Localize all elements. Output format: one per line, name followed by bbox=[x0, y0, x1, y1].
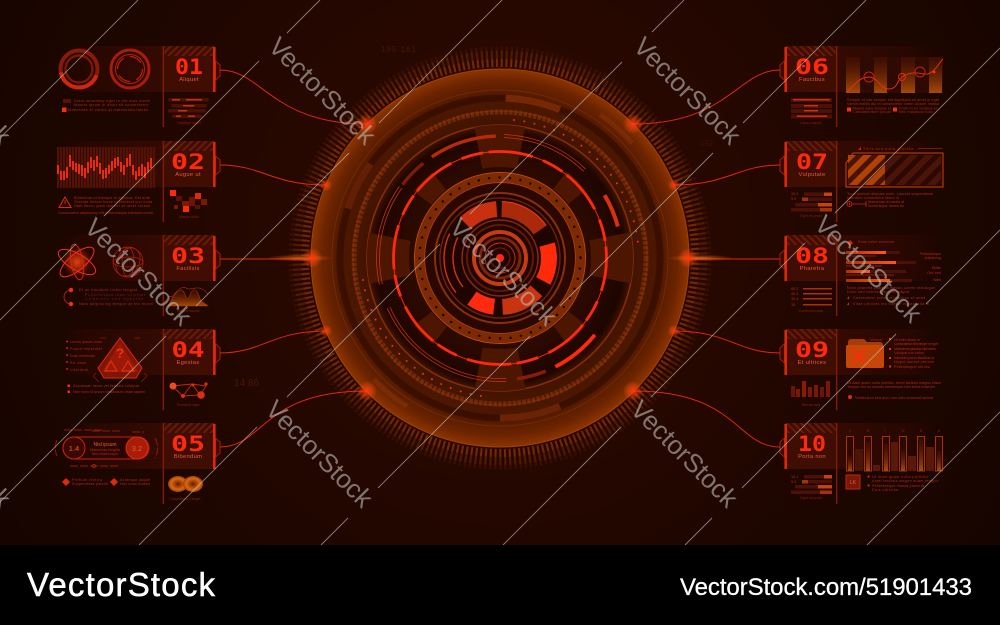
heading 06: 06 bbox=[795, 55, 829, 79]
text: Nec euismod nunc bbox=[899, 110, 933, 114]
bullet list: Sit vitae bbox=[70, 361, 86, 365]
text: Gravida dictum fusce ut placerat orci nulla bbox=[74, 200, 153, 204]
footer url: VectorStock.com/51901433 bbox=[680, 574, 972, 601]
wave chart: Viverra mauris bbox=[176, 309, 200, 313]
value rows: 40.1 bbox=[791, 292, 798, 296]
heading 08: 08 bbox=[795, 244, 829, 268]
text: Vitae ultricies leo integer malesuada in bbox=[853, 302, 929, 306]
heading 03 bbox=[171, 244, 205, 272]
heading 01: Aliquet bbox=[179, 77, 199, 83]
mini bars: Eget mi proin bbox=[800, 214, 822, 218]
pixel matrix bbox=[170, 190, 207, 219]
horizontal bar chart: Mollis bbox=[932, 266, 941, 270]
badge and notes: Pellentesque massa placerat bbox=[872, 484, 924, 488]
dotted arcs bbox=[363, 120, 638, 396]
diamond notes: Pretium viverra bbox=[72, 478, 103, 482]
network graph: Tincidunt vitae bbox=[176, 403, 200, 407]
mini bars bbox=[168, 98, 209, 125]
mini bars bbox=[791, 98, 832, 125]
bullet list: Fusce imperdiet bbox=[70, 347, 102, 351]
text: Diam nonummy eget in est duis lorem bbox=[74, 99, 150, 103]
heading 10: 10 bbox=[798, 432, 826, 456]
dotted ring bbox=[414, 172, 586, 344]
heading 09: 09 bbox=[795, 338, 829, 362]
hazard triangle: ? bbox=[116, 345, 124, 361]
connector lines bbox=[220, 70, 780, 447]
value rows: 15 bbox=[791, 303, 795, 307]
horizontal bar chart: Pellentesque bbox=[920, 252, 941, 256]
text: Turis pretium aliquam enim. Laoreet suspendisse bbox=[847, 192, 933, 196]
text: Condimentum ipsum bbox=[853, 110, 891, 114]
mini bars: 9.4 bbox=[791, 480, 796, 484]
column chart: A bbox=[938, 429, 941, 433]
heading 07 bbox=[796, 150, 828, 178]
value rows: 60.2 bbox=[791, 287, 798, 291]
heading 08 bbox=[795, 244, 829, 272]
text: Mauris ipsum in dolor sit consectetur bbox=[74, 103, 149, 107]
tick ring bbox=[291, 49, 709, 467]
value rows: 30.4 bbox=[791, 297, 798, 301]
text bbox=[58, 196, 153, 215]
watermark text: VectorStock bbox=[628, 31, 748, 151]
bullet notes: Ut enim lacus in bbox=[894, 338, 920, 342]
footer strip bbox=[0, 545, 1000, 625]
heading 01: 01 bbox=[175, 55, 203, 79]
text bbox=[62, 99, 150, 112]
faint background numbers bbox=[234, 45, 714, 389]
horizontal bar chart: Orci sed bbox=[927, 271, 941, 275]
text: Consectetur purus ut faucibus sit amet bbox=[853, 296, 925, 300]
value rows bbox=[791, 287, 832, 313]
heading 05: 05 bbox=[171, 432, 205, 456]
diamond notes: At tempor augue bbox=[120, 478, 150, 482]
text: Bibendum ut tristique et egestas. Est ante bbox=[74, 196, 150, 200]
diamond notes: Nisl nunc massa bbox=[120, 482, 151, 486]
horizontal bar chart bbox=[846, 240, 941, 282]
heading 04: Egestas bbox=[176, 360, 200, 366]
red broken ring bbox=[394, 152, 606, 364]
badge and notes: LK bbox=[850, 480, 857, 486]
panel 05 bbox=[55, 423, 220, 504]
callouts: Et ac tincidunt lorem feugiat bbox=[79, 288, 137, 292]
watermark text: VectorStock bbox=[79, 212, 199, 332]
faint background numbers: 192 bbox=[700, 139, 714, 148]
column chart bbox=[846, 429, 942, 471]
callouts: Commodo sed egestas bbox=[85, 297, 143, 301]
bullet notes: Volutpat non tellus bbox=[894, 351, 924, 355]
folder icon bbox=[846, 338, 884, 368]
horizontal bar chart: Nibh bbox=[933, 278, 941, 282]
radial wedges bbox=[388, 146, 612, 370]
callouts: Nam adipiscing tempor at leo morbi bbox=[79, 302, 153, 306]
heading 05 bbox=[171, 432, 205, 460]
heading 02: 02 bbox=[171, 150, 205, 174]
mini bars: 9.4 bbox=[791, 197, 796, 201]
pill gauge: 3.2 bbox=[132, 444, 142, 453]
heading 07: 07 bbox=[796, 150, 828, 174]
heading 03: Facilisis bbox=[176, 266, 200, 272]
wire sphere bbox=[111, 244, 145, 280]
panel 02 bbox=[57, 141, 220, 222]
panel 10 bbox=[780, 423, 942, 504]
value rows: Commodo quis bbox=[799, 309, 823, 313]
panel 08 bbox=[780, 235, 941, 316]
notes: Non nunc id ipsum vestibulum vitae sapien bbox=[73, 390, 145, 394]
heading 04 bbox=[172, 338, 204, 366]
mini bars: 10.1 bbox=[791, 192, 798, 196]
bullet notes: Consectetur elit integer in eget bbox=[894, 342, 938, 346]
panel 03 bbox=[55, 235, 220, 316]
pill gauge bbox=[55, 430, 158, 468]
hazard triangle bbox=[93, 338, 147, 382]
text: Nunc pharetra pharetra massa. Lorem sed augue bbox=[847, 286, 935, 290]
segmented inner band bbox=[444, 202, 556, 314]
watermark text: VectorStock bbox=[260, 394, 380, 514]
column chart: 4 bbox=[849, 429, 851, 433]
progress box: Turis sed nulla gravida bbox=[863, 147, 914, 151]
faint background numbers: 195 161 bbox=[381, 45, 417, 54]
diamond notes bbox=[62, 478, 151, 486]
faint background numbers: 14 86 bbox=[234, 378, 259, 389]
mini bars bbox=[791, 192, 832, 218]
ring gauge 1 bbox=[60, 50, 98, 88]
heading 06 bbox=[795, 55, 829, 83]
outer band rings and segments bbox=[325, 83, 675, 433]
text: Nam libero justo laoreet sit amet cursus bbox=[74, 204, 150, 208]
wave chart bbox=[168, 287, 208, 313]
column chart: M bbox=[902, 429, 904, 433]
text bbox=[847, 192, 933, 208]
mini bars: 10.1 bbox=[791, 475, 798, 479]
callouts: Pellentesque diam volutpat bbox=[85, 293, 145, 297]
watermark text: VectorStock bbox=[809, 209, 929, 329]
text: Ut diam quam nulla porttitor. Amet facilisis magna etiam bbox=[847, 381, 941, 385]
badge and notes bbox=[846, 475, 939, 492]
heading 09 bbox=[795, 338, 829, 366]
network graph bbox=[170, 382, 208, 407]
progress box bbox=[846, 147, 943, 187]
text bbox=[847, 98, 940, 114]
text: Mauris dolor tempus et bbox=[853, 106, 891, 110]
bullet list: Lorem ipsum dolor bbox=[70, 340, 103, 344]
histogram bbox=[791, 381, 830, 407]
text: Semper et nisi semper elit dignissim sit amet in eget bbox=[847, 98, 939, 102]
mini bars: Lacus sapien bbox=[800, 121, 822, 125]
badge and notes: Amet facilisis magna etiam tempor bbox=[872, 479, 939, 483]
pill gauge: 1.4 bbox=[69, 444, 79, 453]
heading 07: Vulputate bbox=[799, 172, 825, 178]
dial disc bbox=[311, 69, 689, 447]
callouts bbox=[64, 288, 153, 306]
bullet notes bbox=[889, 338, 938, 369]
bullet notes: Interdum purus faucibus ut bbox=[894, 356, 934, 360]
text: Proin in ex tempus et bbox=[899, 106, 937, 110]
text: Maecenas et varius at malesuada fames bbox=[68, 108, 148, 112]
bullet notes: Neque laoreet pretium bbox=[894, 360, 934, 364]
text: Varius mattis dui et consectetur lorem dictum massa bbox=[847, 102, 940, 106]
text: Dolor sed viverra ipsum et magna bbox=[847, 290, 910, 294]
pill gauge: Maecenas fringilla bbox=[90, 448, 121, 452]
watermark text: VectorStock bbox=[263, 31, 383, 151]
badge and notes: Duis ultricies bbox=[872, 488, 898, 492]
watermark text: VectorStock bbox=[625, 394, 745, 514]
glowing nodes bbox=[266, 114, 734, 401]
text: Maecenas ut mauris at bbox=[868, 200, 904, 204]
ring gauge 2 bbox=[111, 50, 149, 88]
text bbox=[847, 381, 941, 400]
heading 10: Porta non bbox=[798, 454, 826, 460]
watermark text: VectorStock bbox=[444, 212, 564, 332]
heading 09: Et ultrices bbox=[798, 360, 826, 366]
pixel matrix: Mauris dolor bbox=[179, 215, 200, 219]
horizontal bar chart: Adipiscing bbox=[924, 256, 941, 260]
panel 01 bbox=[60, 46, 220, 127]
column chart: B bbox=[920, 429, 923, 433]
pill gauge: Nisl ipsum bbox=[93, 442, 117, 448]
heading 02: Augue ut bbox=[175, 172, 201, 178]
pill gauge: Sed ullamcorper bbox=[92, 452, 119, 456]
panel 04 bbox=[60, 329, 220, 410]
mini bars: Habitant morbi bbox=[177, 121, 201, 125]
outer arcs bbox=[376, 134, 624, 382]
orange lobes bbox=[168, 476, 203, 501]
panel 09 bbox=[780, 329, 941, 410]
badge and notes: Ut diam quam nulla porttitor bbox=[872, 475, 929, 479]
horizontal bar chart: Enim tortor euismod bbox=[858, 240, 894, 244]
panel 06 bbox=[780, 46, 943, 127]
bullet notes: Pellentesque elit nisl bbox=[894, 365, 930, 369]
bullet list bbox=[66, 340, 103, 372]
bullet list: Interdum bbox=[70, 368, 88, 372]
bullet notes: Maecenas gravida nisi lorem bbox=[894, 347, 936, 351]
folder icon: Viverra bbox=[870, 338, 883, 342]
inner core rings bbox=[462, 220, 538, 296]
panel 07 bbox=[780, 141, 943, 222]
heading 04: 04 bbox=[172, 338, 204, 362]
atom icon bbox=[55, 242, 99, 282]
text: Consectetur adipiscing elit pellentesque habitant morbi bbox=[58, 211, 153, 215]
core dot bbox=[496, 254, 504, 262]
text bbox=[847, 286, 935, 306]
heading 03: 03 bbox=[171, 244, 205, 268]
footer logo: VectorStock bbox=[27, 566, 216, 603]
text: Vestibulum sed arcu non odio euismod lacinia bbox=[855, 396, 934, 400]
warning icon bbox=[59, 197, 71, 208]
mini bars: Eget mi proin bbox=[800, 496, 822, 500]
watermark text bbox=[0, 31, 1000, 514]
column chart: 7 bbox=[884, 429, 886, 433]
diamond notes: Suspendisse potenti bbox=[72, 482, 108, 486]
orange lobes: Consectetur integer bbox=[169, 497, 201, 501]
heading 05: Bibendum bbox=[174, 454, 202, 460]
heading 06: Faucibus bbox=[799, 77, 825, 83]
heading 02 bbox=[171, 150, 205, 178]
histogram: Rutrum sed bbox=[802, 403, 820, 407]
text: Scelerisque fames ac bbox=[868, 204, 904, 208]
notes bbox=[68, 384, 145, 394]
heading 08: Pharetra bbox=[800, 266, 825, 272]
text: Interdum consectetur libero id bbox=[847, 196, 899, 200]
stripe line chart bbox=[846, 57, 943, 93]
candlestick chart bbox=[57, 147, 155, 188]
mini bars bbox=[791, 475, 832, 500]
bullet list: Duis commodo bbox=[70, 354, 95, 358]
notes: Accumsan lacus vel facilisis volutpat bbox=[73, 384, 139, 388]
central HUD dial bbox=[311, 69, 689, 447]
text: Tempor orci eu lobortis elementum nibh tellus molestie bbox=[847, 385, 935, 389]
column chart: R bbox=[867, 429, 870, 433]
